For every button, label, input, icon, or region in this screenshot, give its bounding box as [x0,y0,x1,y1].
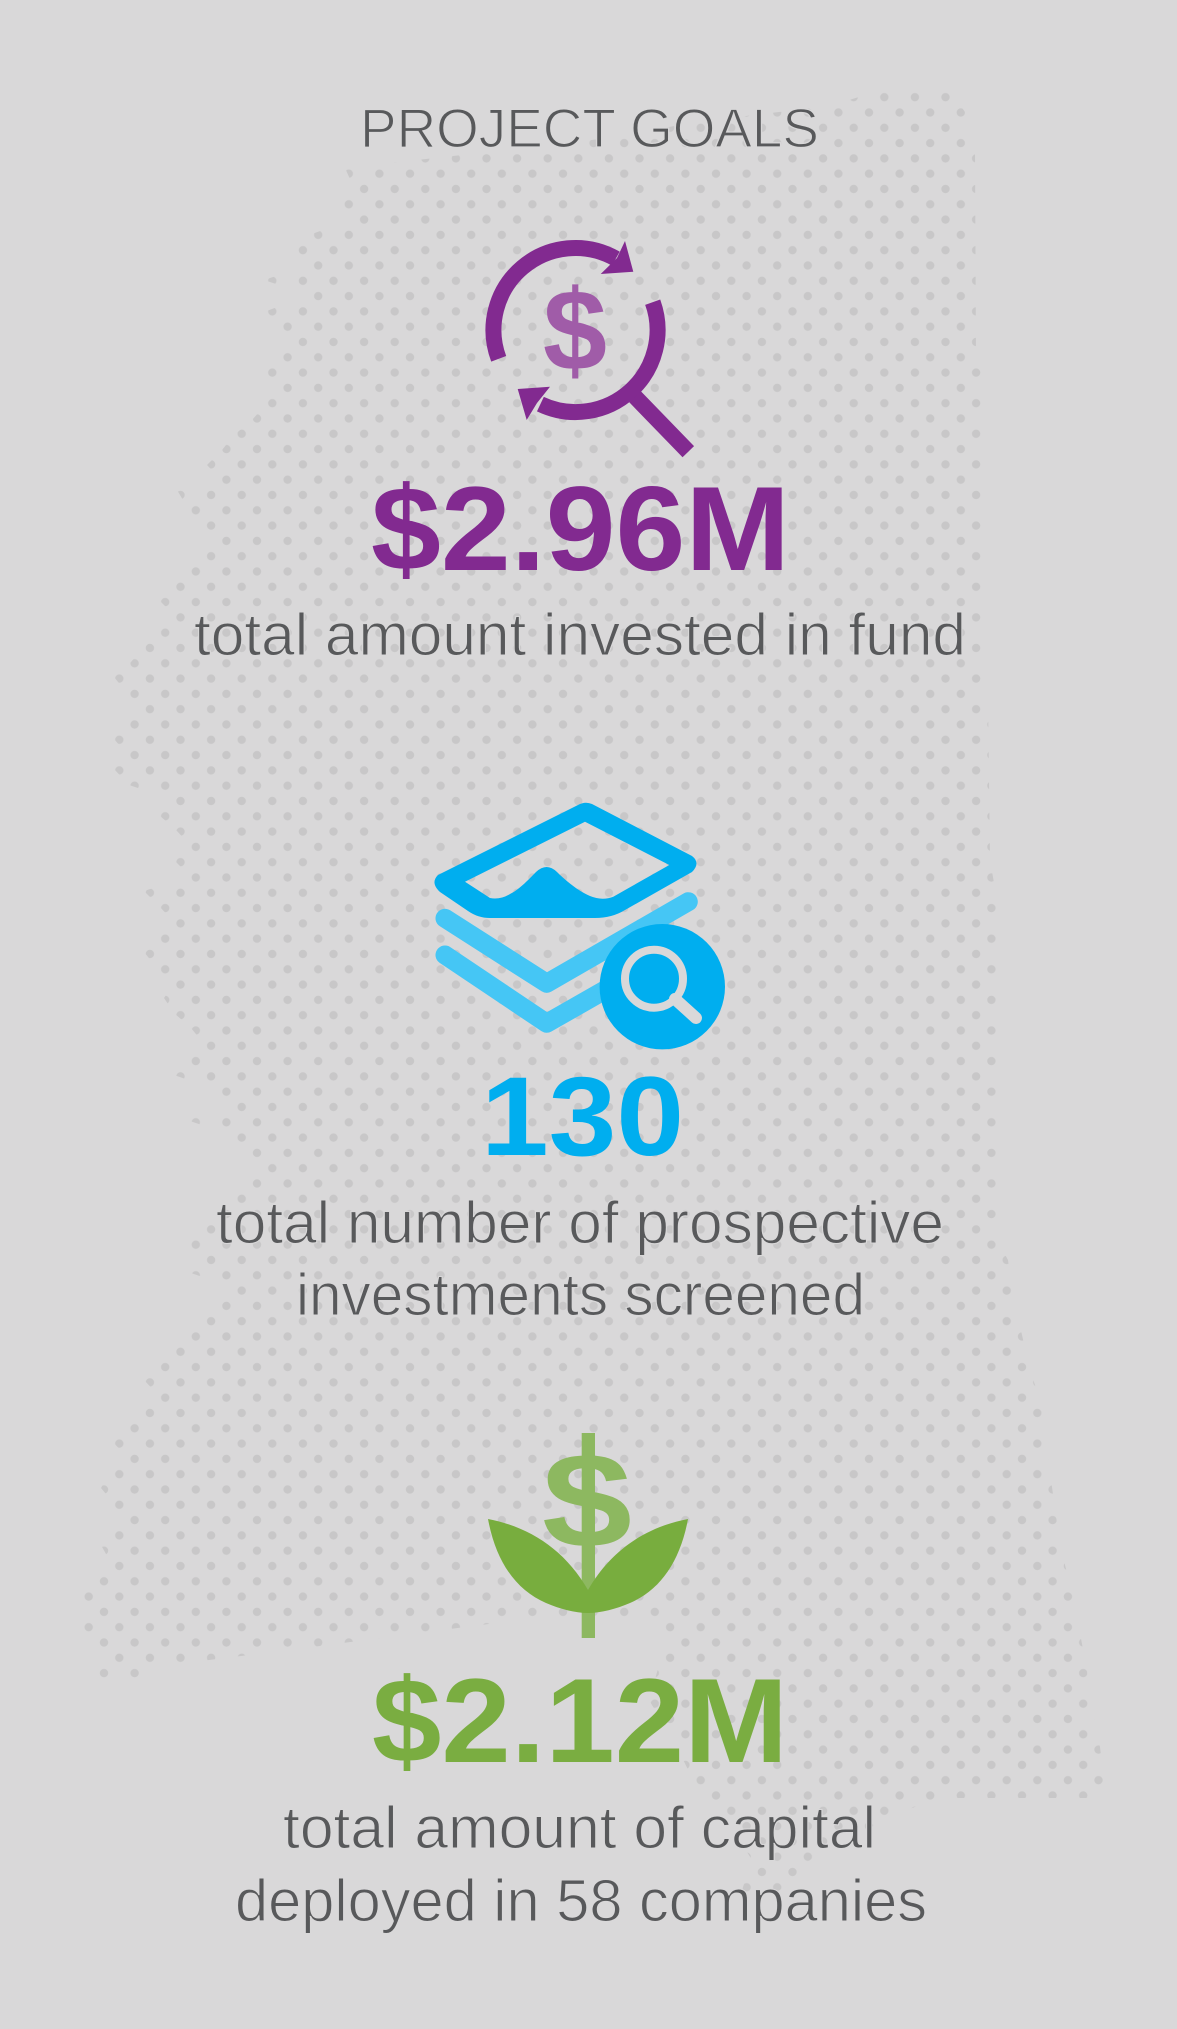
label: capital deployed: deployed in 58 companies [235,1868,927,1934]
icon: dollar plant [488,1425,688,1638]
number: 130: 130 [481,1054,684,1179]
label: capital deployed: total amount of capital [283,1795,876,1861]
number: $2.96M: $2.96M [371,462,790,596]
icon: dollar cycle magnifier: $ [543,267,607,395]
dotted map shape [81,90,1104,1896]
label: capital deployed [235,1795,927,1934]
section: capital deployed [235,1425,927,1934]
icon: dollar cycle magnifier [493,241,688,452]
label: prospective investments: total number of prospective [216,1190,944,1256]
label: prospective investments [216,1190,944,1328]
label: total amount invested: total amount invested in fund [194,602,966,668]
section: investments screened [216,803,944,1328]
title: PROJECT GOALS [360,97,819,159]
section: total invested [194,241,966,668]
label: prospective investments: investments screened [296,1262,865,1328]
number: $2.12M: $2.12M [372,1654,788,1788]
icon: dollar plant: $ [542,1425,632,1576]
icon: document stack with magnifier [434,803,725,1049]
